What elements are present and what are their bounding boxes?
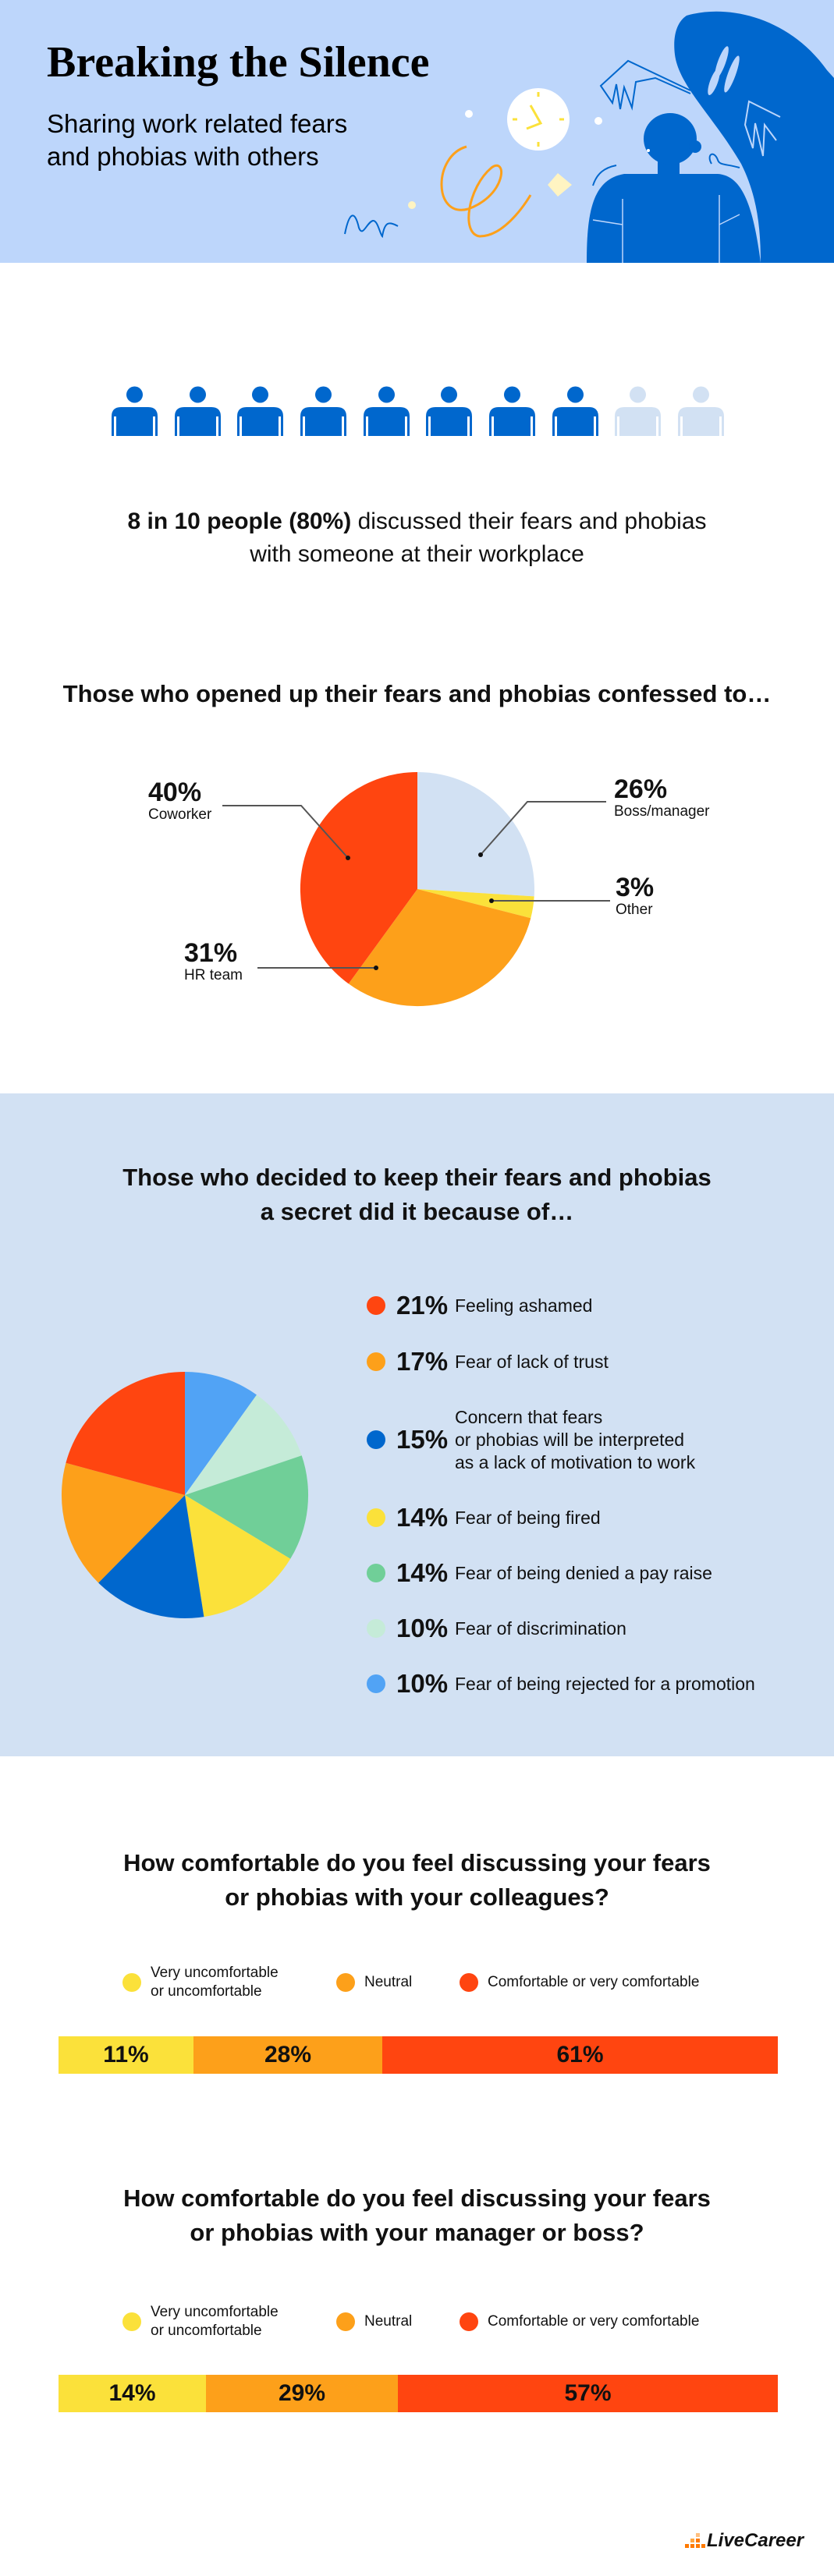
- legend: manager: [122, 2304, 699, 2339]
- legend: colleagues: [122, 1965, 699, 2000]
- label: coworker: Coworker: [148, 806, 211, 823]
- legend: reasons: [367, 1291, 755, 1698]
- subtitle: [47, 109, 347, 171]
- bar: manager: 57%: [564, 2380, 612, 2406]
- heading: [122, 1164, 712, 1225]
- heading: colleagues: or phobias with your colleagues?: [225, 1883, 609, 1911]
- legend: reasons: Fear of being fired: [455, 1507, 601, 1527]
- pie chart: confessed to: [222, 772, 610, 1006]
- legend: colleagues: Neutral: [364, 1974, 412, 1990]
- legend: reasons: Fear of discrimination: [455, 1618, 626, 1638]
- heading: manager: [123, 2184, 711, 2246]
- heading: colleagues: [123, 1849, 711, 1911]
- legend: reasons: as a lack of motivation to work: [455, 1452, 695, 1472]
- legend: reasons: Concern that fears: [455, 1407, 602, 1427]
- label: HR: 31%: [184, 938, 237, 968]
- label: HR: [184, 938, 243, 983]
- stat text: 8 in 10 people (80%) discussed their fears and phobias: [127, 508, 707, 534]
- legend: reasons: Fear of being denied a pay raise: [455, 1563, 712, 1583]
- stat text: [127, 508, 707, 567]
- legend: reasons: 21%: [396, 1291, 448, 1320]
- heading: manager: or phobias with your manager or boss?: [190, 2219, 644, 2246]
- legend: manager: Comfortable or very comfortable: [488, 2313, 699, 2330]
- legend: reasons: Fear of lack of trust: [455, 1351, 609, 1371]
- subtitle: and phobias with others: [47, 142, 319, 171]
- legend: colleagues: or uncomfortable: [151, 1983, 262, 2000]
- stat text: with someone at their workplace: [250, 541, 584, 567]
- legend: manager: or uncomfortable: [151, 2323, 262, 2339]
- heading: colleagues: How comfortable do you feel discussing your fears: [123, 1849, 711, 1876]
- heading: manager: How comfortable do you feel discussing your fears: [123, 2184, 711, 2212]
- bar: colleagues: 11%: [103, 2042, 149, 2068]
- legend: manager: Very uncomfortable: [151, 2304, 279, 2320]
- bar: manager: 29%: [279, 2380, 325, 2406]
- header banner: [0, 0, 834, 263]
- label: other: Other: [616, 902, 653, 918]
- label: HR: HR team: [184, 967, 243, 983]
- title: Breaking the Silence: [47, 38, 430, 87]
- legend: reasons: 17%: [396, 1347, 448, 1376]
- legend: manager: Neutral: [364, 2313, 412, 2330]
- bar: colleagues: 28%: [264, 2042, 311, 2068]
- legend: colleagues: Comfortable or very comfortable: [488, 1974, 699, 1990]
- subtitle: Sharing work related fears: [47, 109, 347, 138]
- legend: reasons: 14%: [396, 1503, 448, 1532]
- bar: colleagues: 61%: [556, 2042, 604, 2068]
- legend: reasons: 10%: [396, 1669, 448, 1698]
- label: other: [616, 873, 654, 918]
- heading: a secret did it because of…: [261, 1198, 573, 1225]
- heading: Those who decided to keep their fears and phobias: [122, 1164, 712, 1191]
- label: other: 3%: [616, 873, 654, 902]
- legend: reasons: or phobias will be interpreted: [455, 1429, 684, 1449]
- legend: reasons: Feeling ashamed: [455, 1295, 592, 1315]
- legend: reasons: Fear of being rejected for a promotion: [455, 1674, 755, 1694]
- legend: reasons: 14%: [396, 1558, 448, 1587]
- heading: confessed to: Those who opened up their fears and phobias confessed to…: [63, 680, 771, 707]
- legend: colleagues: Very uncomfortable: [151, 1965, 279, 1981]
- label: boss: 26%: [614, 774, 667, 804]
- label: boss: Boss/manager: [614, 803, 710, 820]
- logo: LiveCareer: [707, 2530, 804, 2551]
- bar: manager: 14%: [108, 2380, 156, 2406]
- clock: [507, 88, 570, 151]
- bar: manager: [59, 2375, 778, 2412]
- people icons row: [112, 387, 724, 436]
- legend: reasons: 15%: [396, 1425, 448, 1454]
- label: boss: [614, 774, 710, 820]
- bar: colleagues: [59, 2036, 778, 2074]
- pie chart: reasons: [61, 1372, 308, 1618]
- illustration: ghost and person: [344, 11, 834, 263]
- label: coworker: 40%: [148, 778, 201, 807]
- label: coworker: [148, 778, 211, 823]
- panel: secret reasons: [0, 1093, 834, 1756]
- legend: reasons: 10%: [396, 1614, 448, 1642]
